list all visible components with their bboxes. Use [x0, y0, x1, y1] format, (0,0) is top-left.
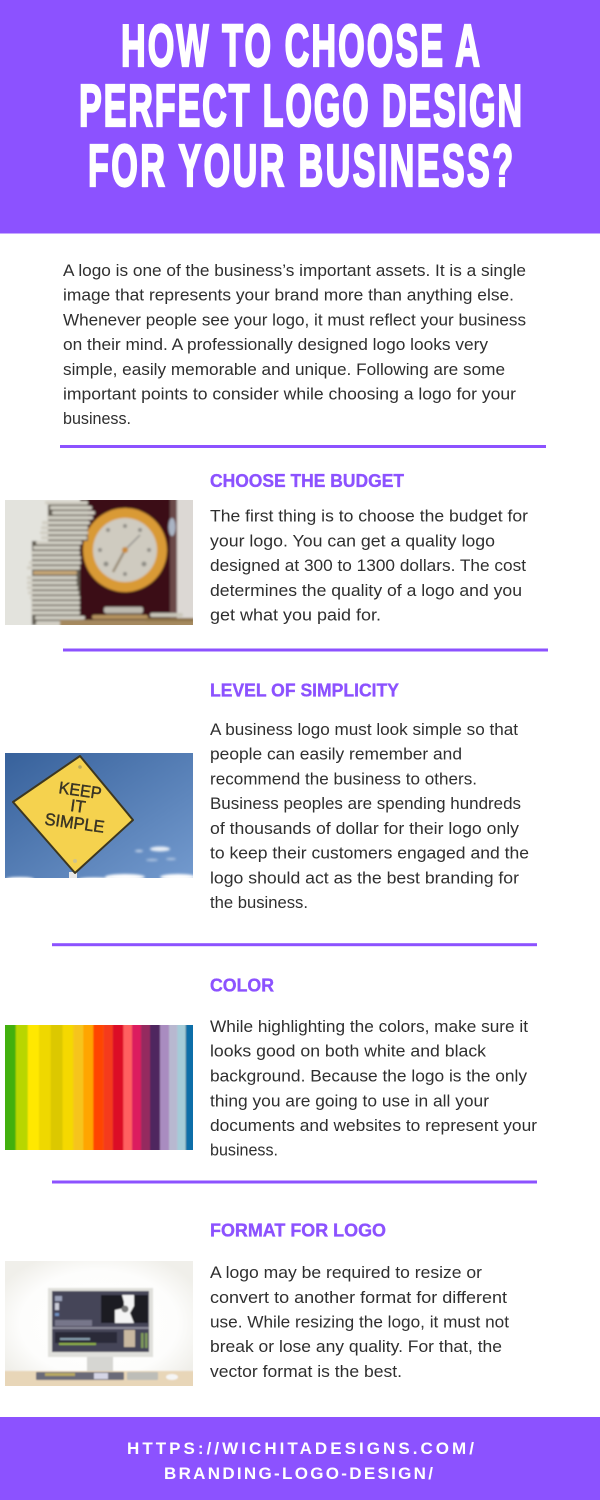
- heading: level of simplicity: LEVEL OF SIMPLICITY: [210, 681, 399, 701]
- body text: format for logo: [210, 1263, 509, 1381]
- body text: choose the budget: determines the quality of a logo and you: [210, 581, 522, 600]
- body text: choose the budget: The first thing is to choose the budget for: [210, 507, 528, 526]
- body text: level of simplicity: to keep their customers engaged and the: [210, 844, 529, 863]
- body text: format for logo: use. While resizing the logo, it must not: [210, 1312, 509, 1332]
- body text: level of simplicity: the business.: [210, 893, 308, 912]
- body text: level of simplicity: recommend the business to others.: [210, 769, 477, 788]
- body text: color: looks good on both white and black: [210, 1042, 487, 1061]
- body text: format for logo: vector format is the best.: [210, 1362, 402, 1381]
- body text: level of simplicity: Business peoples are spending hundreds: [210, 794, 521, 813]
- panel: choose the budget: [3, 471, 528, 628]
- body text: choose the budget: designed at 300 to 1300 dollars. The cost: [210, 556, 526, 575]
- panel: level of simplicity: [5, 681, 529, 912]
- footer url: BRANDING-LOGO-DESIGN/: [164, 1464, 433, 1483]
- heading: color: COLOR: [210, 976, 274, 996]
- panel: format for logo: [3, 1221, 509, 1388]
- body text: level of simplicity: A business logo must look simple so that: [210, 720, 518, 739]
- sign text: [45, 782, 104, 833]
- intro text: image that represents your brand more than anything else.: [63, 286, 514, 305]
- image: keep it simple sign: [5, 753, 196, 881]
- heading: choose the budget: CHOOSE THE BUDGET: [210, 471, 404, 491]
- image: desktop computer: [3, 1261, 195, 1388]
- intro text: [63, 261, 526, 428]
- body text: choose the budget: get what you paid for.: [210, 606, 381, 625]
- intro text: simple, easily memorable and unique. Following are some: [63, 360, 505, 379]
- image: color stripes: [3, 1023, 196, 1152]
- body text: level of simplicity: people can easily remember and: [210, 745, 462, 764]
- title: HOW TO CHOOSE A: [121, 13, 480, 79]
- heading: format for logo: FORMAT FOR LOGO: [210, 1221, 386, 1241]
- intro text: A logo is one of the business’s important assets. It is a single: [63, 261, 526, 280]
- body text: level of simplicity: logo should act as the best branding for: [210, 868, 519, 887]
- body text: color: business.: [210, 1141, 278, 1160]
- panel: header: [0, 0, 600, 234]
- sign diamond: [13, 756, 133, 873]
- body text: format for logo: A logo may be required to resize or: [210, 1263, 482, 1282]
- body text: color: [210, 1017, 537, 1160]
- panel: footer: [0, 1417, 600, 1500]
- intro text: important points to consider while choosing a logo for your: [63, 384, 516, 404]
- body text: format for logo: convert to another format for different: [210, 1288, 507, 1307]
- sign text: KEEP: [58, 778, 103, 803]
- body text: level of simplicity: of thousands of dollar for their logo only: [210, 819, 520, 838]
- panel: color: [3, 976, 537, 1160]
- body text: format for logo: break or lose any quality. For that, the: [210, 1337, 502, 1356]
- intro text: on their mind. A professionally designed logo looks very: [63, 335, 489, 354]
- image: coins and clock: [3, 498, 196, 628]
- sign text: IT: [69, 796, 87, 817]
- footer url: [127, 1439, 474, 1483]
- sign text: SIMPLE: [44, 810, 106, 837]
- title: [79, 13, 522, 199]
- body text: level of simplicity: [210, 720, 529, 912]
- body text: choose the budget: [210, 507, 528, 625]
- body text: color: background. Because the logo is the only: [210, 1066, 528, 1086]
- intro text: Whenever people see your logo, it must reflect your business: [63, 310, 526, 329]
- body text: choose the budget: your logo. You can get a quality logo: [210, 531, 495, 550]
- body text: color: documents and websites to represent your: [210, 1116, 537, 1135]
- body text: color: thing you are going to use in all your: [210, 1091, 489, 1110]
- title: PERFECT LOGO DESIGN: [79, 73, 522, 139]
- footer url: HTTPS://WICHITADESIGNS.COM/: [127, 1439, 474, 1458]
- title: FOR YOUR BUSINESS?: [88, 133, 513, 199]
- body text: color: While highlighting the colors, make sure it: [210, 1017, 528, 1036]
- intro text: business.: [63, 409, 131, 428]
